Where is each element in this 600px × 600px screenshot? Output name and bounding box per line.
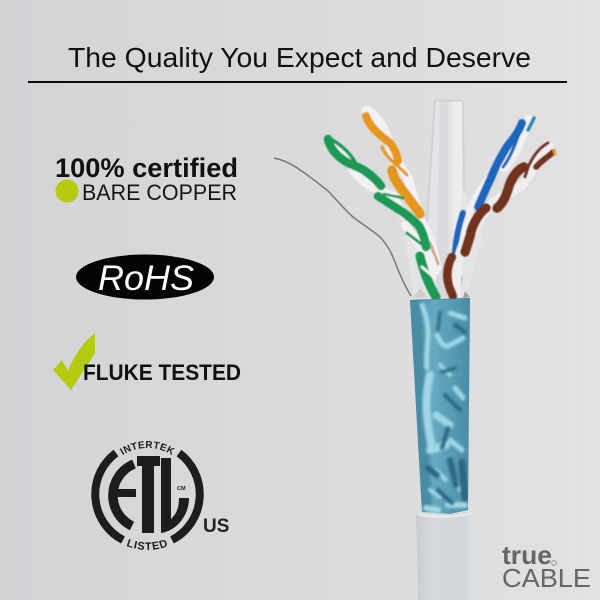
badge: RoHS xyxy=(76,254,214,300)
badge: RoHS: RoHS xyxy=(98,259,194,298)
badge: Fluke tested: FLUKE TESTED xyxy=(83,360,241,385)
badge: ETL listed logo xyxy=(91,441,229,550)
foil shield xyxy=(410,297,470,514)
LISTED arc text: LISTED xyxy=(126,539,167,550)
INTERTEK arc text: INTERTEK xyxy=(120,441,175,455)
badge: Fluke tested xyxy=(53,333,241,390)
green pair xyxy=(328,138,436,297)
title: The Quality You Expect and Deserve xyxy=(68,42,531,73)
logo: trueCABLE: CABLE xyxy=(502,563,591,593)
CM mark: CM xyxy=(177,486,186,492)
foil highlights xyxy=(422,305,465,510)
orange pair xyxy=(366,110,438,268)
foil shadows xyxy=(428,312,465,503)
logo: trueCABLE: true xyxy=(502,540,552,570)
badge: 100% certified bare copper: 100% certified xyxy=(55,153,238,183)
badge: 100% certified bare copper: BARE COPPER xyxy=(82,180,237,205)
outer jacket xyxy=(416,512,475,600)
icon: green dot xyxy=(56,180,78,202)
icon: check mark xyxy=(53,333,95,390)
title rule xyxy=(28,81,567,83)
US mark: US xyxy=(203,516,229,537)
foil top edge highlights xyxy=(413,288,470,298)
blue pair xyxy=(455,118,534,296)
badge: 100% certified bare copper xyxy=(55,153,238,205)
outer ring xyxy=(95,453,200,540)
registered mark xyxy=(552,561,556,565)
letters E T L xyxy=(113,456,189,533)
cable xyxy=(274,100,555,600)
drain wire xyxy=(274,158,411,296)
brown pair xyxy=(447,143,555,296)
logo: trueCABLE xyxy=(502,540,591,593)
clear film xyxy=(405,100,483,296)
